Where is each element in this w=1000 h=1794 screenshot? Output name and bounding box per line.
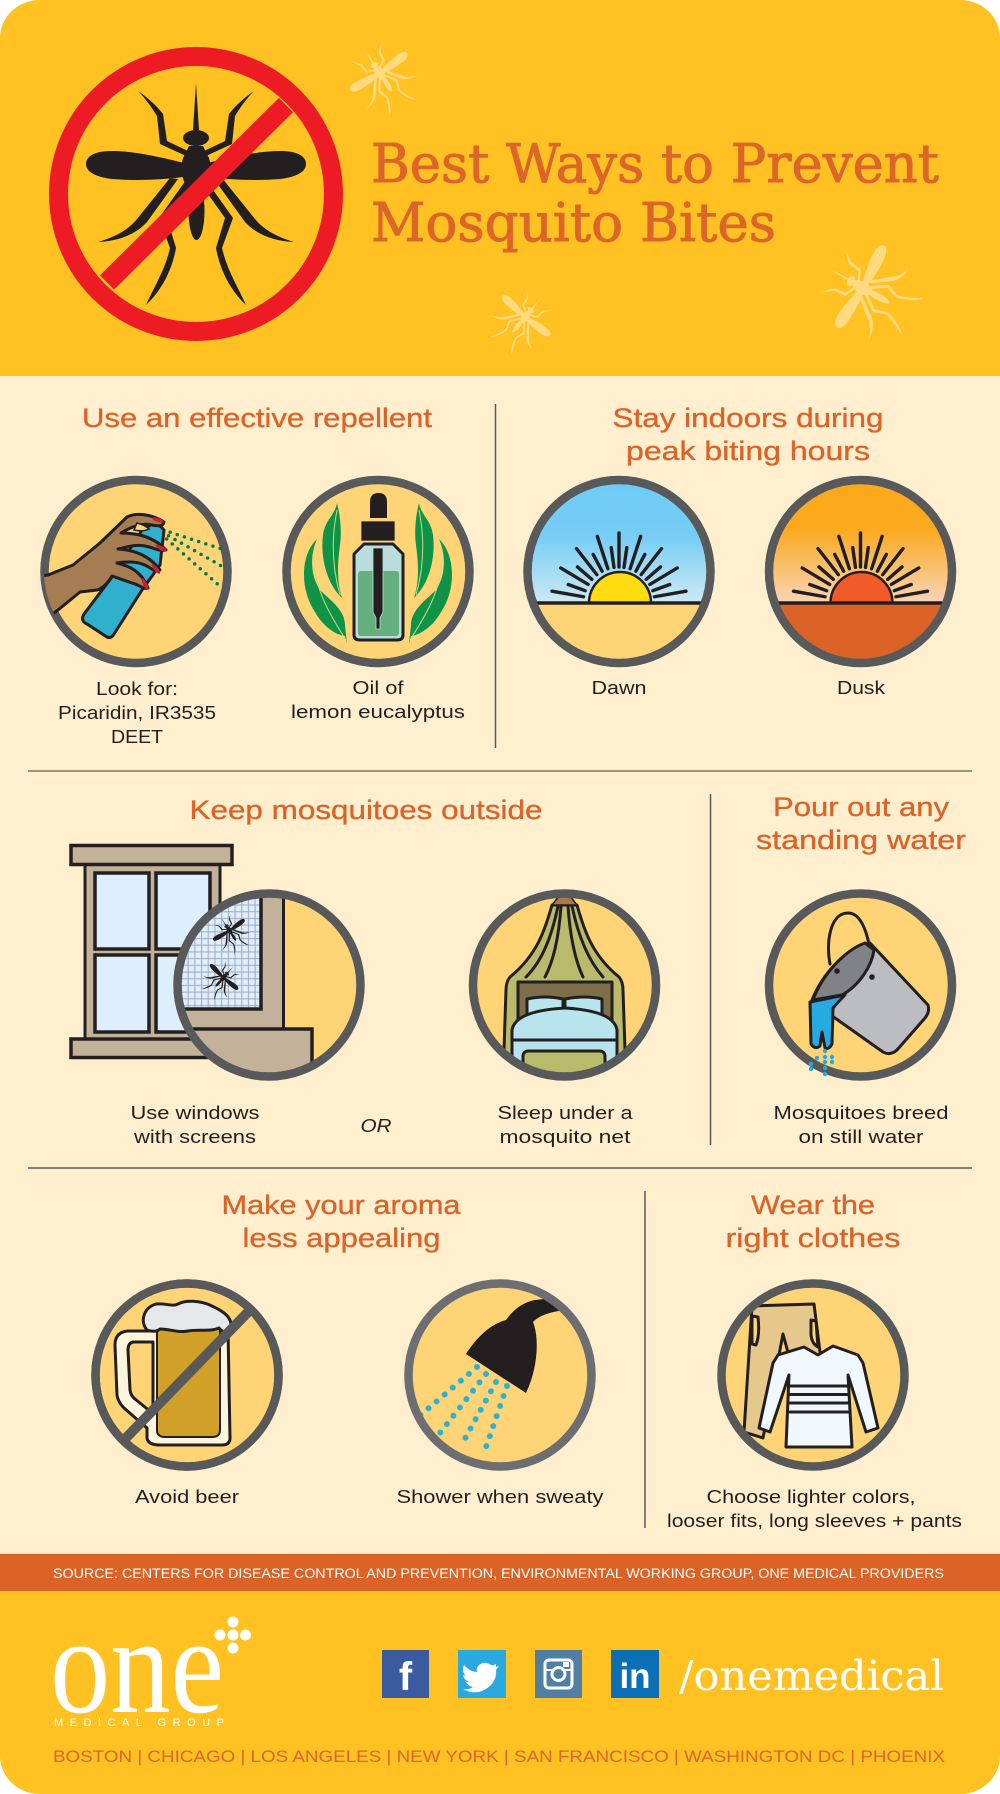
heading: pour out standing water: standing water bbox=[756, 825, 966, 855]
icon: eucalyptus oil bottle bbox=[286, 480, 470, 663]
icon: instagram bbox=[535, 1650, 582, 1698]
panel: keep mosquitoes outside bbox=[71, 795, 656, 1147]
icon: dawn sun bbox=[525, 480, 715, 663]
heading: pour out standing water: Pour out any bbox=[773, 792, 950, 822]
caption: avoid beer: Avoid beer bbox=[135, 1486, 239, 1507]
icon: shower head bbox=[408, 1284, 592, 1466]
icon: twitter bbox=[458, 1650, 506, 1698]
caption: oil of lemon eucalyptus: Oil of bbox=[352, 677, 405, 698]
panel: stay indoors bbox=[525, 403, 956, 698]
icon: pants and shirt bbox=[722, 1284, 904, 1466]
icon: bed with mosquito net bbox=[473, 894, 656, 1091]
caption: mosquitoes breed on still water: Mosquitoes breed bbox=[774, 1102, 948, 1123]
caption: shower when sweaty: Shower when sweaty bbox=[396, 1486, 604, 1507]
icon: dusk sun bbox=[766, 480, 956, 663]
label: or: OR bbox=[360, 1115, 392, 1136]
icon: linkedin bbox=[611, 1650, 659, 1698]
divider: row one bbox=[28, 770, 972, 772]
panel: footer bbox=[0, 1589, 1000, 1794]
heading: stay indoors: Stay indoors during bbox=[612, 403, 884, 433]
social handle: /onemedical bbox=[679, 1652, 944, 1700]
panel: make your aroma less appealing bbox=[96, 1190, 604, 1507]
logo: one medical group: one bbox=[50, 1589, 224, 1743]
divider: outside and standing water bbox=[710, 794, 712, 1145]
icon: linkedin: in bbox=[619, 1657, 651, 1696]
caption: sleep under a mosquito net: mosquito net bbox=[500, 1126, 630, 1147]
caption: look for: DEET bbox=[111, 726, 163, 747]
caption: use windows with screens: with screens bbox=[133, 1126, 256, 1147]
decorative mosquito bottom right bbox=[822, 245, 924, 340]
caption: dawn: Dawn bbox=[592, 677, 646, 698]
caption: choose lighter colors: looser fits, long sleeves + pants bbox=[667, 1510, 962, 1531]
heading: aroma: Make your aroma bbox=[222, 1190, 462, 1220]
icon: hand with spray can bbox=[30, 480, 228, 663]
divider: aroma and clothes bbox=[644, 1191, 646, 1528]
caption: choose lighter colors: Choose lighter colors, bbox=[706, 1486, 916, 1507]
icon: window screen magnifier bbox=[173, 889, 365, 1081]
heading: clothes: right clothes bbox=[726, 1223, 900, 1253]
icon: window frame bbox=[71, 846, 232, 1058]
cities list: BOSTON | CHICAGO | LOS ANGELES | NEW YORK | SAN FRANCISCO | WASHINGTON DC | PHOENIX bbox=[53, 1747, 945, 1766]
divider: row two bbox=[28, 1167, 972, 1169]
panel: header bbox=[0, 0, 1000, 376]
caption: sleep under a mosquito net: Sleep under a bbox=[498, 1102, 633, 1123]
title: Best Ways to Prevent bbox=[371, 134, 939, 195]
caption: use windows with screens: Use windows bbox=[130, 1102, 260, 1123]
caption: dusk: Dusk bbox=[837, 677, 886, 698]
heading: keep mosquitoes outside: Keep mosquitoes outside bbox=[190, 795, 542, 825]
source bar: SOURCE: CENTERS FOR DISEASE CONTROL AND PREVENTION, ENVIRONMENTAL WORKING GROUP, ONE MEDICAL PROVIDERS bbox=[53, 1566, 944, 1581]
divider: repellent and indoors bbox=[494, 404, 496, 748]
caption: look for: Look for: bbox=[96, 678, 178, 699]
icon: crossed-out beer mug bbox=[96, 1284, 278, 1466]
icon: crossed-out mosquito bbox=[58, 56, 334, 332]
heading: repellent: Use an effective repellent bbox=[82, 403, 433, 433]
caption: oil of lemon eucalyptus: lemon eucalyptus bbox=[291, 701, 465, 722]
icon: facebook: f bbox=[399, 1655, 413, 1699]
heading: aroma: less appealing bbox=[242, 1223, 440, 1253]
caption: mosquitoes breed on still water: on still water bbox=[798, 1126, 924, 1147]
icon: facebook bbox=[382, 1650, 429, 1699]
title: Mosquito Bites bbox=[371, 193, 776, 254]
logo: one medical group: MEDICAL GROUP bbox=[54, 1717, 224, 1729]
decorative mosquito bottom middle bbox=[490, 290, 552, 355]
source bar bbox=[0, 1554, 1000, 1591]
heading: clothes: Wear the bbox=[751, 1190, 875, 1220]
icon: bucket pouring water bbox=[769, 894, 952, 1076]
heading: stay indoors: peak biting hours bbox=[626, 436, 870, 466]
panel: use an effective repellent bbox=[30, 403, 470, 747]
caption: look for: Picaridin, IR3535 bbox=[58, 702, 216, 723]
panel: wear the right clothes bbox=[667, 1190, 962, 1531]
panel: pour out standing water bbox=[756, 792, 966, 1147]
decorative mosquito top bbox=[350, 44, 417, 116]
